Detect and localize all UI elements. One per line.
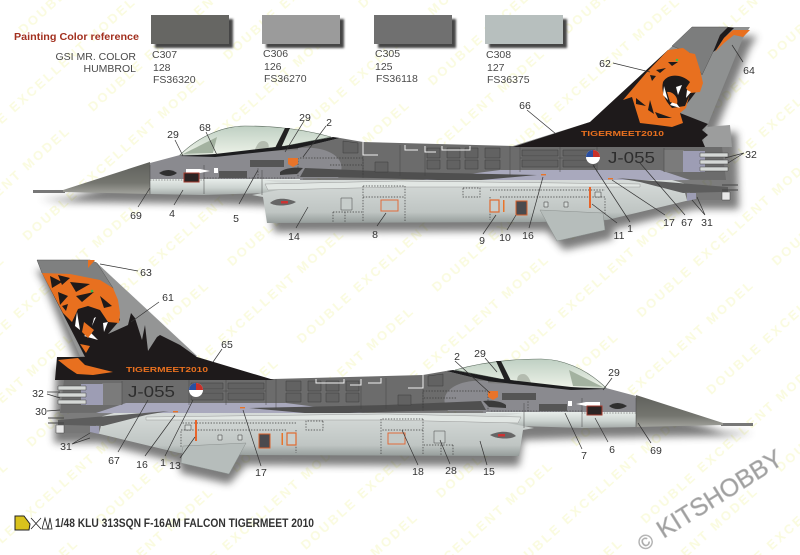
- callout 31: [692, 197, 713, 229]
- callout 69: [638, 423, 662, 457]
- callout 65: 65: [221, 339, 233, 351]
- callout 11: 11: [614, 230, 625, 242]
- callout 29: [167, 129, 183, 156]
- callout 14: 14: [288, 231, 300, 243]
- callout 29: 29: [167, 129, 179, 141]
- swatch C306: [262, 15, 344, 85]
- black tail marking: [513, 50, 708, 147]
- swatch C305: FS36118: [376, 73, 418, 85]
- callout 68: [199, 122, 217, 155]
- swatch C306: FS36270: [264, 73, 307, 85]
- callout 13: [169, 437, 195, 472]
- footer title: 1/48 KLU 313SQN F-16AM FALCON TIGERMEET 2010: [55, 516, 314, 530]
- swatch C305: [374, 15, 456, 85]
- callout 29: [603, 367, 620, 390]
- roundel: [586, 150, 600, 164]
- callout 29: [285, 112, 311, 152]
- fuselage: [33, 126, 738, 241]
- callout 31: 31: [701, 217, 713, 229]
- tail code: TIGERMEET2010: [581, 129, 664, 138]
- kitshobby watermark: KITSHOBBY: [652, 444, 788, 544]
- callout 63: [100, 264, 152, 279]
- callout 30: 30: [35, 406, 47, 418]
- callout 30: [35, 406, 60, 418]
- callout 67: 67: [681, 217, 693, 229]
- callout 2: [454, 351, 490, 393]
- callout 9: 9: [479, 235, 485, 247]
- tail fin base: [42, 262, 197, 356]
- callout 18: [402, 430, 424, 478]
- callout 17: [612, 180, 675, 229]
- callout 6: 6: [609, 444, 615, 456]
- callout 8: 8: [372, 229, 378, 241]
- fin top panels: [672, 27, 728, 75]
- callout 66: [519, 100, 556, 134]
- callout 62: [599, 58, 650, 72]
- serial: J-055: [608, 150, 655, 167]
- callout 28: 28: [445, 465, 457, 477]
- callout 62: 62: [599, 58, 611, 70]
- fin top box: [37, 260, 113, 288]
- callout 5: [233, 170, 258, 225]
- roundel: [189, 383, 203, 397]
- callout 28: [440, 440, 457, 477]
- aircraft: upper side view: [33, 27, 757, 250]
- callout 11: [592, 204, 625, 242]
- tail code: TIGERMEET2010: [126, 365, 208, 374]
- callout 66: 66: [519, 100, 531, 112]
- callout 32: [725, 149, 757, 163]
- callout 7: [565, 413, 587, 462]
- callout 69: 69: [650, 445, 662, 457]
- callout 4: 4: [169, 208, 175, 220]
- callout 67: [108, 400, 148, 467]
- callout 32: 32: [745, 149, 757, 161]
- callout 68: 68: [199, 122, 211, 134]
- callout 10: [499, 215, 516, 244]
- callout 1: 1: [627, 223, 633, 235]
- callout 9: [479, 215, 496, 247]
- callout 29: [474, 348, 497, 372]
- callout 61: [131, 292, 174, 322]
- callout 29: 29: [299, 112, 311, 124]
- exhaust fairing: [703, 125, 732, 147]
- callout 14: [288, 207, 308, 243]
- callout 1: [160, 400, 193, 469]
- callout 16: 16: [136, 459, 148, 471]
- fin black marking: [42, 273, 274, 380]
- callout 2: 2: [454, 351, 460, 363]
- swatch C306: 126: [264, 61, 282, 73]
- callout 7: 7: [581, 450, 587, 462]
- color reference header: [14, 15, 567, 86]
- swatch C308: 127: [487, 62, 505, 74]
- swatch C307: 128: [153, 62, 171, 74]
- callout 67: [640, 163, 693, 229]
- callout 10: 10: [499, 232, 511, 244]
- swatch C307: C307: [152, 49, 177, 61]
- callout 32: [32, 388, 60, 400]
- callout 15: [480, 441, 495, 478]
- callout 13: 13: [169, 460, 181, 472]
- drop shadow: [40, 36, 757, 250]
- callout 8: [372, 213, 386, 241]
- callout 18: 18: [412, 466, 424, 478]
- callout 4: [169, 190, 183, 220]
- callout 15: 15: [483, 466, 495, 478]
- color reference header: HUMBROL: [83, 63, 136, 75]
- brand logo: [15, 516, 52, 530]
- callout 1: 1: [160, 457, 166, 469]
- callout 69: 69: [130, 210, 142, 222]
- callouts: upper aircraft: [130, 45, 757, 247]
- callout 31: 31: [60, 441, 72, 453]
- callouts: lower aircraft: [32, 264, 662, 479]
- callout 2: 2: [326, 117, 332, 129]
- swatch C308: [485, 15, 567, 86]
- tiger head: [623, 48, 703, 127]
- tiger head: [42, 273, 120, 353]
- aircraft: lower side view: [36, 260, 753, 484]
- swatch C308: FS36375: [487, 74, 530, 86]
- callout 32: 32: [32, 388, 44, 400]
- callout 2: [303, 117, 332, 157]
- swatch C307: [151, 15, 233, 86]
- tail flame: [58, 358, 113, 375]
- callout 1: [593, 165, 633, 235]
- callout 63: 63: [140, 267, 152, 279]
- callout 64: [732, 45, 755, 77]
- callout 17: 17: [663, 217, 675, 229]
- callout 6: [595, 418, 615, 456]
- swatch C305: 125: [375, 61, 393, 73]
- row labels: GSI MR. COLOR: [55, 51, 136, 63]
- callout 16: [136, 415, 175, 471]
- swatch C308: C308: [486, 49, 511, 61]
- heading: painting color reference: Painting Color reference: [14, 32, 139, 43]
- drop shadow: [36, 270, 753, 484]
- callout 17: [243, 410, 267, 479]
- serial: J-055: [128, 384, 175, 401]
- tail fin base: [513, 27, 750, 147]
- callout 16: 16: [522, 230, 534, 242]
- callout 17: 17: [255, 467, 267, 479]
- callout 31: [60, 433, 90, 453]
- callout 64: 64: [743, 65, 755, 77]
- callout 67: 67: [108, 455, 120, 467]
- callout 16: [522, 177, 543, 242]
- callout 69: [130, 188, 150, 222]
- callout 61: 61: [162, 292, 174, 304]
- swatch C306: C306: [263, 48, 288, 60]
- callout 29: 29: [608, 367, 620, 379]
- swatch C305: C305: [375, 48, 400, 60]
- swatch C307: FS36320: [153, 74, 196, 86]
- fin top orange mark: [88, 260, 95, 268]
- callout 29: 29: [474, 348, 486, 360]
- tail flame: [713, 27, 750, 52]
- callout 65: [213, 339, 233, 362]
- callout 5: 5: [233, 213, 239, 225]
- fuselage: [48, 359, 753, 474]
